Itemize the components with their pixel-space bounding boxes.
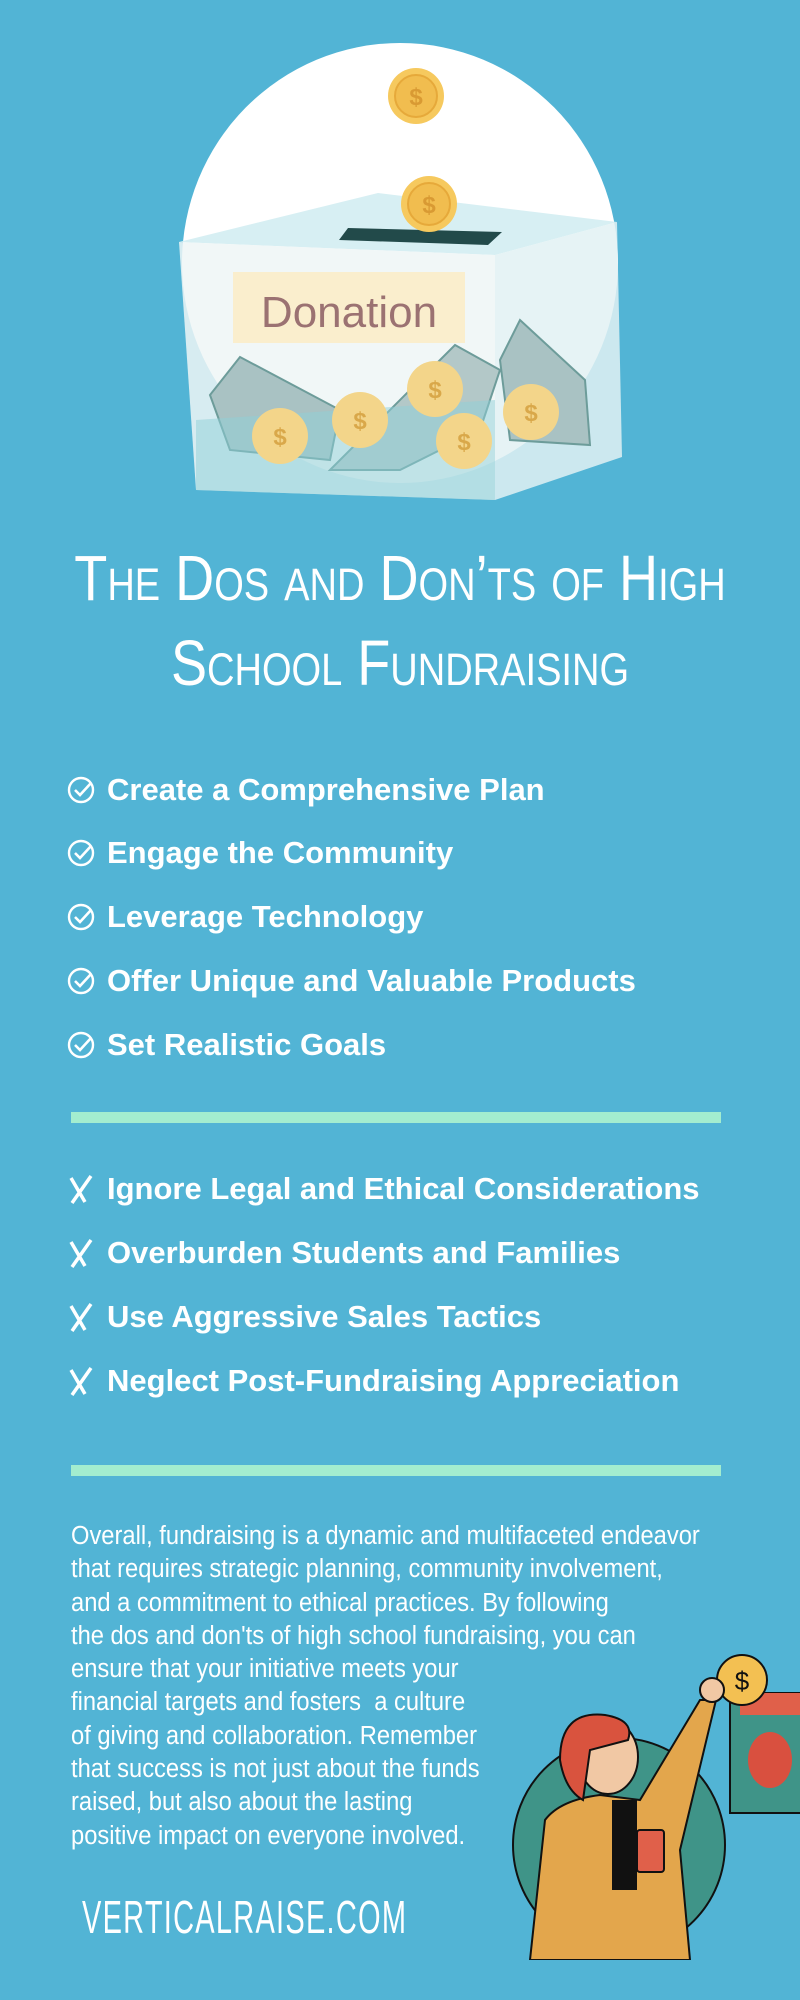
do item 3: Leverage Technology [107,899,423,934]
donation label: Donation [261,288,437,337]
box lid [179,193,617,255]
coins in box: $ [273,424,287,451]
website url: VERTICALRAISE.COM [82,1891,407,1943]
illustration: donation box [179,43,622,500]
do item 5: Set Realistic Goals [107,1027,386,1062]
illustration: student donating [512,1654,800,1960]
title: The Dos and Don’ts of High [74,542,726,614]
do item 1: Create a Comprehensive Plan [107,772,545,807]
conclusion paragraph: financial targets and fosters a culture [71,1688,465,1716]
do item 4: Offer Unique and Valuable Products [107,963,636,998]
conclusion paragraph: of giving and collaboration. Remember [71,1722,477,1750]
coins in box: $ [457,429,471,456]
conclusion paragraph: raised, but also about the lasting [71,1788,412,1816]
conclusion paragraph: the dos and don'ts of high school fundraising, you can [71,1622,636,1650]
dos list [68,772,636,1062]
coin falling top: $ [409,84,423,111]
dont item 1: Ignore Legal and Ethical Considerations [107,1171,700,1206]
donation label [233,272,465,343]
conclusion paragraph [71,1522,700,1850]
coins in box: $ [428,377,442,404]
white circle backdrop [182,43,618,483]
conclusion paragraph: that success is not just about the funds [71,1755,480,1783]
conclusion paragraph: that requires strategic planning, community involvement, [71,1555,663,1583]
coins in box: $ [524,400,538,427]
coin falling top [388,68,444,124]
coin entering slot [401,176,457,232]
conclusion paragraph: Overall, fundraising is a dynamic and multifaceted endeavor [71,1522,700,1550]
dont item 2: Overburden Students and Families [107,1235,620,1270]
person [530,1655,767,1960]
title: School Fundraising [171,627,629,699]
coins in box [252,361,559,469]
dont item 3: Use Aggressive Sales Tactics [107,1299,541,1334]
teal circle [513,1738,725,1952]
donts list [70,1171,700,1398]
donation box [730,1693,800,1813]
conclusion paragraph: ensure that your initiative meets your [71,1655,459,1683]
conclusion paragraph: positive impact on everyone involved. [71,1822,465,1850]
title [74,542,726,699]
dont item 4: Neglect Post-Fundraising Appreciation [107,1363,679,1398]
box body [179,222,622,500]
coin entering slot: $ [422,192,436,219]
conclusion paragraph: and a commitment to ethical practices. By following [71,1589,609,1617]
do item 2: Engage the Community [107,835,453,870]
coins in box: $ [353,408,367,435]
person: $ [735,1666,750,1696]
